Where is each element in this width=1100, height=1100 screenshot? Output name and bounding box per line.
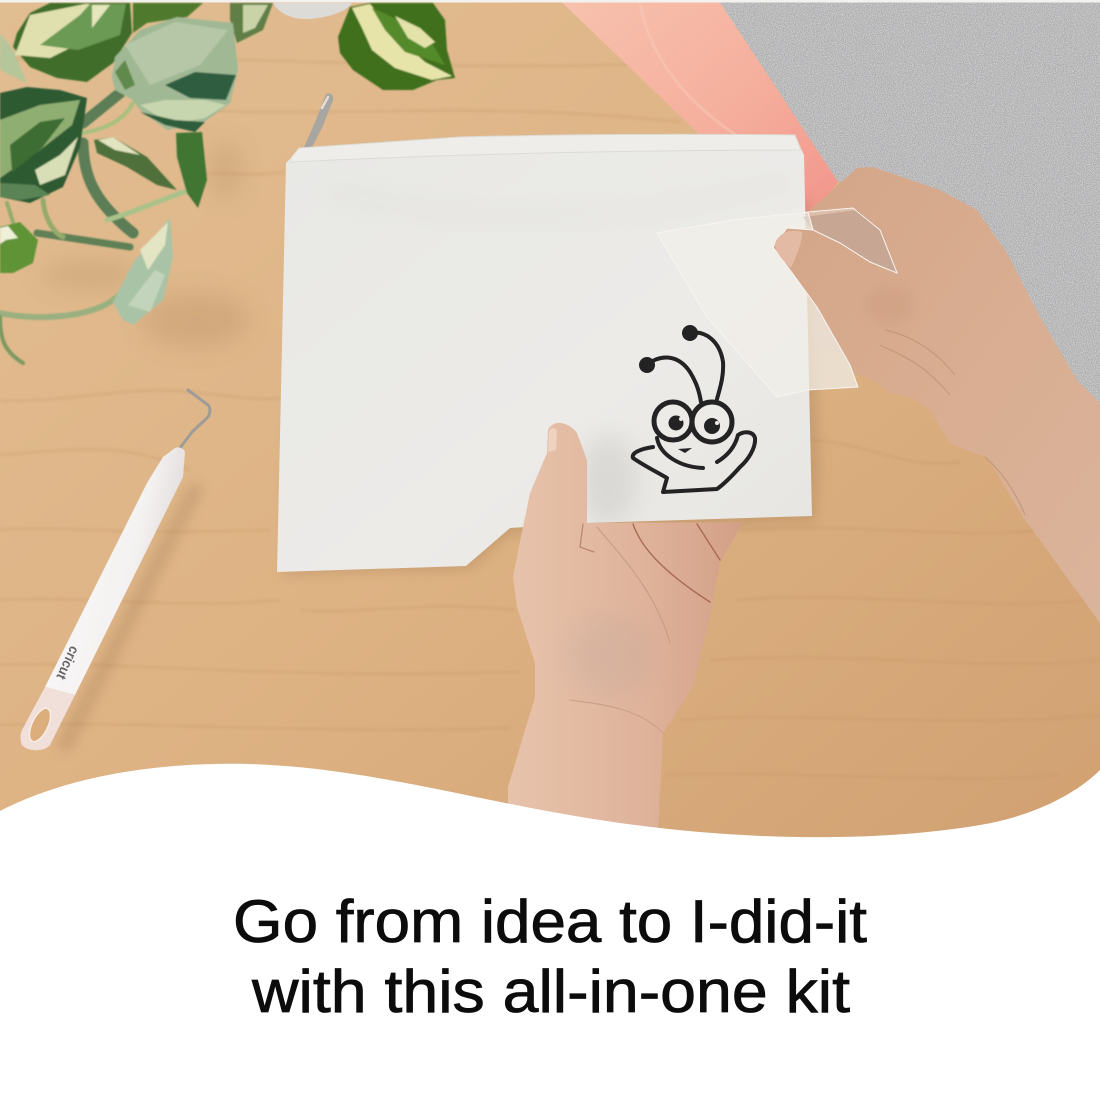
headline line 1: Go from idea to I-did-it [233,888,867,955]
leaf: upper right [338,3,455,90]
leaf: top right small [230,3,273,43]
leaf: top centre behind [133,3,203,33]
pink holographic sheet [562,2,838,230]
metal hook [180,390,210,448]
transfer tape sheet [657,208,897,397]
pink tip [20,687,75,750]
zipper band [291,134,801,162]
lower hand holding pouch [508,423,743,832]
shadow beside thumb [578,435,638,525]
thumb nail of upper hand [775,231,802,268]
leaf: corner pale [0,33,27,83]
top edge strip [0,0,1100,2]
weeding tool shadow [65,490,195,745]
zipper pull [299,93,333,153]
pupils [668,416,720,453]
wood desk background [0,0,1100,860]
leaf: large left [0,87,87,203]
tape over pouch and lower fingers [657,212,858,397]
leaf: pale lower [113,218,173,325]
tinted knuckle [866,285,914,325]
leaf: top left [13,3,132,82]
eye highlights [679,417,719,425]
antennae [647,333,723,402]
shaded gap between thumb and fingers [803,210,897,273]
tip hole [25,705,55,745]
pouch shadow [282,200,820,575]
white pot [273,3,352,19]
brand label: cricut [53,644,83,682]
headline line 2: with this all-in-one kit [251,958,850,1025]
headline [233,888,867,1025]
plant with variegated leaves [0,3,455,363]
leaf: narrow hanging [176,132,207,208]
eyes [654,402,692,440]
leaf shadows [40,140,250,348]
cricut weeding tool [20,390,210,750]
palm creases [570,524,720,733]
tape over upper fingers [808,208,897,273]
cartoon bug decal [633,325,755,492]
silver glitter sheet [720,2,1100,405]
white wave panel [0,764,1100,1100]
antenna tips [639,325,698,373]
pouch fold shading [330,180,790,217]
white canvas pouch [277,134,812,572]
thick vine stems [0,93,190,363]
upper hand peeling tape [773,167,1100,623]
leaf: large marbled [112,17,238,132]
thumb nail [548,428,557,452]
handle [45,447,185,695]
wrist shadow [565,615,655,695]
knuckle folds [880,330,1025,515]
leaf: small left [0,222,38,273]
lower face and arms [633,432,755,492]
leaf: narrow centre [94,137,177,190]
